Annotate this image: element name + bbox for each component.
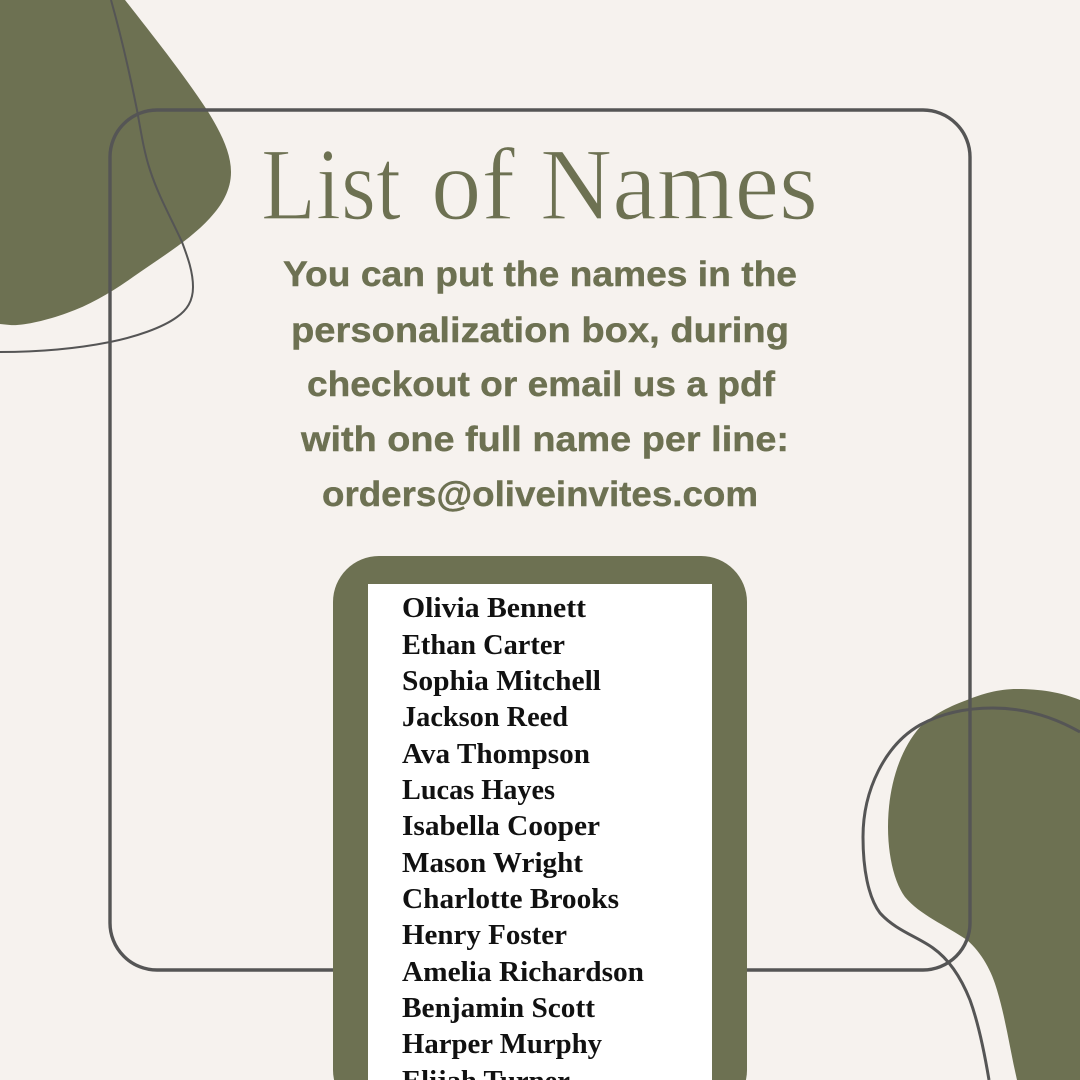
instructions text block: You can put the names in the [283,255,797,294]
names list text: Charlotte Brooks [402,883,619,915]
names list text: Amelia Richardson [402,956,644,988]
names list text: Ava Thompson [402,738,590,770]
names list text: Henry Foster [402,919,567,951]
instructions text block: orders@oliveinvites.com [322,475,758,514]
panel: names list [333,556,747,1080]
names list text: Ethan Carter [402,629,565,661]
panel: olive backing card [333,556,747,1080]
names list text: Isabella Cooper [402,810,600,842]
names list text: Sophia Mitchell [402,665,601,697]
blob: bottom-right olive shape [888,689,1080,1080]
instructions text block: personalization box, during [291,311,789,350]
names list text: Harper Murphy [402,1028,602,1060]
names list text: Jackson Reed [402,701,568,733]
names list text: Olivia Bennett [402,592,586,624]
instructions text block: with one full name per line: [300,420,789,459]
names list text: Benjamin Scott [402,992,595,1024]
frame: rounded rectangle outline [110,110,970,970]
names list text: Lucas Hayes [402,774,555,806]
decorative outline: top-left curve [0,0,193,352]
names list text [402,592,644,1080]
title: List [261,128,401,242]
panel: white sheet [368,584,712,1080]
title: Names [540,128,818,242]
instructions text block [283,255,797,514]
decorative outline: bottom-right curve [863,708,1080,1080]
names list text: Mason Wright [402,847,583,879]
title: of [431,128,516,242]
title [261,128,818,242]
blob: top-left olive shape [0,0,231,325]
instructions text block: checkout or email us a pdf [307,365,775,404]
